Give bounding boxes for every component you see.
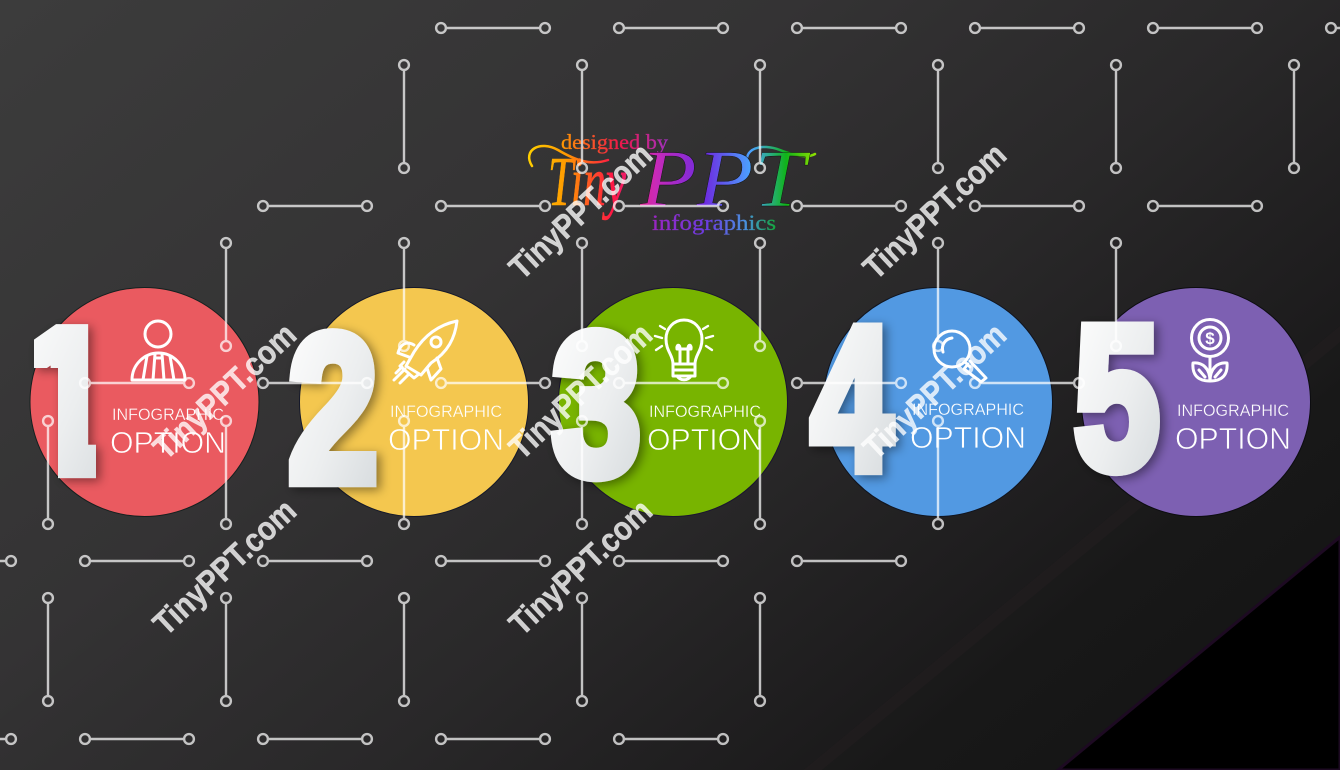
watermarks: TinyPPT.com: TinyPPT.com xyxy=(856,136,1013,286)
icon: magnifier xyxy=(934,331,986,382)
logo: designed by TinyPPT infographics: designed by xyxy=(561,130,669,154)
icon: rocket xyxy=(394,321,457,383)
number 3: 3 xyxy=(552,291,641,517)
label: infographic option 4: OPTION xyxy=(910,420,1026,455)
label: infographic option 2: OPTION xyxy=(388,422,504,457)
logo: designed by TinyPPT infographics: Tiny xyxy=(548,144,627,221)
icon: money flower xyxy=(1192,320,1228,381)
label: infographic option 1 xyxy=(110,405,226,460)
watermarks: TinyPPT.com: TinyPPT.com xyxy=(856,316,1013,466)
label: infographic option 4 xyxy=(910,400,1026,455)
logo: designed by TinyPPT infographics xyxy=(529,130,815,235)
watermarks: TinyPPT.com: TinyPPT.com xyxy=(502,316,659,466)
panel: option 2 circle xyxy=(300,288,528,516)
label: infographic option 3: INFOGRAPHIC xyxy=(649,402,761,421)
label: infographic option 5: OPTION xyxy=(1175,421,1291,456)
icon: businessman xyxy=(132,321,185,380)
number 1: 1 xyxy=(12,286,118,516)
logo: designed by TinyPPT infographics: PPT xyxy=(639,133,811,224)
label: infographic option 3: OPTION xyxy=(647,422,763,457)
number 5: 5 xyxy=(1074,284,1160,512)
watermarks: TinyPPT.com: TinyPPT.com xyxy=(146,492,303,642)
logo: designed by TinyPPT infographics: infographics xyxy=(652,210,776,235)
label: infographic option 2 xyxy=(388,402,504,457)
number 2: 2 xyxy=(288,291,378,526)
watermarks: TinyPPT.com xyxy=(146,136,1013,642)
label: infographic option 4: INFOGRAPHIC xyxy=(912,400,1024,419)
icon: money flower: $ xyxy=(1205,329,1215,348)
label: infographic option 1: INFOGRAPHIC xyxy=(112,405,224,424)
label: infographic option 5: INFOGRAPHIC xyxy=(1177,401,1289,420)
panel: option 5 circle xyxy=(1082,288,1310,516)
watermarks: TinyPPT.com: TinyPPT.com xyxy=(146,316,303,466)
watermarks: TinyPPT.com: TinyPPT.com xyxy=(502,136,659,286)
panel: option 1 circle xyxy=(30,288,259,516)
label: infographic option 5 xyxy=(1175,401,1291,456)
panel: option 4 circle xyxy=(824,288,1052,516)
label: infographic option 1: OPTION xyxy=(110,425,226,460)
number 4: 4 xyxy=(811,284,892,513)
icon: light bulb xyxy=(655,320,713,380)
panel: option 3 circle xyxy=(558,288,788,516)
watermarks: TinyPPT.com: TinyPPT.com xyxy=(502,492,659,642)
label: infographic option 2: INFOGRAPHIC xyxy=(390,402,502,421)
label: infographic option 3 xyxy=(647,402,763,457)
